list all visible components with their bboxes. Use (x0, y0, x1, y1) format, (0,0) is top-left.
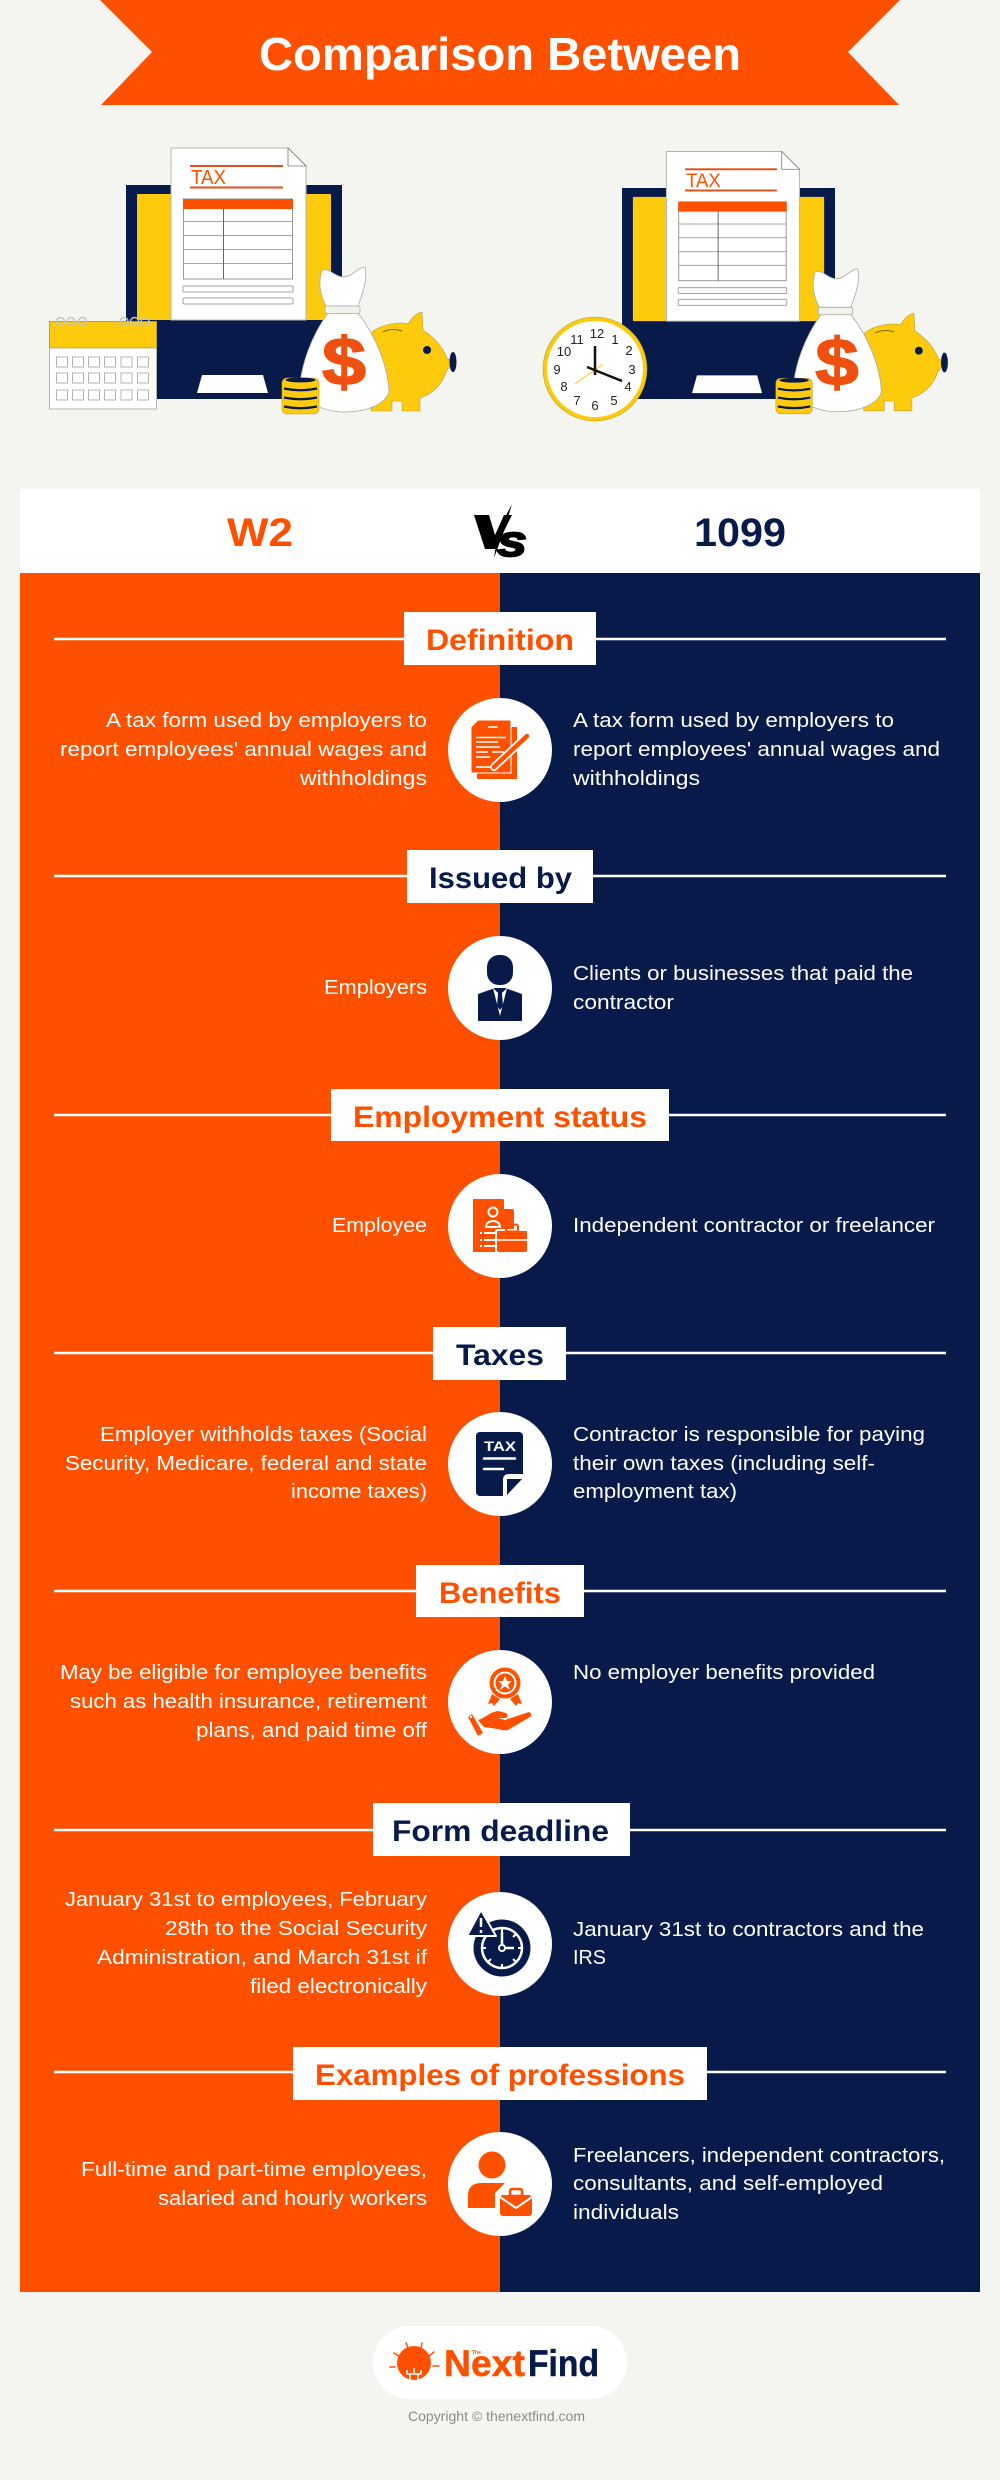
icon: person with briefcase (468, 2152, 532, 2216)
illustration: 1099 tax form, clock, money bag and piggy bank: 1 (611, 332, 619, 347)
1099 issued by text (573, 962, 913, 1014)
W2 taxes text: Security, Medicare, federal and state (65, 1452, 427, 1475)
1099 taxes text: their own taxes (including self- (573, 1452, 875, 1475)
section: Issued by: Issued by (429, 862, 572, 895)
W2 form deadline text (65, 1888, 428, 1998)
section: Employment status (54, 1089, 946, 1278)
illustration: 1099 tax form, clock, money bag and piggy bank: 7 (573, 393, 581, 408)
W2 form deadline text: 28th to the Social Security (165, 1917, 428, 1940)
1099 taxes text: employment tax) (573, 1480, 737, 1503)
1099 benefits text: No employer benefits provided (573, 1661, 875, 1684)
W2 definition text: report employees' annual wages and (60, 738, 427, 761)
illustration: 1099 tax form, clock, money bag and piggy bank: 11 (570, 332, 584, 347)
section: Form deadline: Form deadline (392, 1815, 609, 1848)
W2 examples text: salaried and hourly workers (158, 2187, 427, 2210)
1099 definition text: withholdings (572, 767, 700, 790)
1099 issued by text: contractor (573, 991, 674, 1014)
section: Form deadline (54, 1803, 946, 1998)
icon: tax document: TAX (484, 1439, 516, 1454)
illustration: 1099 tax form, clock, money bag and piggy bank: 12 (590, 326, 604, 341)
1099 examples text (573, 2144, 945, 2224)
section: Examples of professions (54, 2047, 946, 2236)
1099 examples text: individuals (573, 2201, 679, 2224)
icon: tax document (476, 1432, 524, 1497)
1099 examples text: Freelancers, independent contractors, (573, 2144, 945, 2167)
1099 form deadline text (573, 1918, 924, 1969)
section: Benefits (54, 1565, 946, 1754)
W2 form deadline text: January 31st to employees, February (65, 1888, 428, 1911)
W2 issued by text: Employers (324, 976, 427, 999)
section: Taxes: Taxes (456, 1339, 544, 1372)
1099 form deadline text: January 31st to contractors and the (573, 1918, 924, 1941)
W2 taxes text (65, 1423, 427, 1503)
W2 benefits text: such as health insurance, retirement (70, 1690, 427, 1713)
1099 taxes text (573, 1423, 925, 1503)
column header bar: W2 (227, 511, 293, 555)
W2 benefits text: May be eligible for employee benefits (60, 1661, 427, 1684)
W2 form deadline text: Administration, and March 31st if (97, 1946, 427, 1969)
1099 issued by text: Clients or businesses that paid the (573, 962, 913, 985)
1099 examples text: consultants, and self-employed (573, 2172, 883, 2195)
icon: hand holding medal (468, 1668, 531, 1736)
title banner: Comparison Between (259, 28, 741, 80)
versus badge (474, 504, 527, 566)
title banner (100, 0, 900, 105)
illustration: 1099 tax form, clock, money bag and piggy bank: TAX (686, 170, 721, 192)
icon: clock with warning (467, 1910, 530, 1976)
illustration: 1099 tax form, clock, money bag and piggy bank: 3 (628, 362, 636, 377)
footer logo: Next (444, 2343, 525, 2384)
section: Definition (54, 612, 946, 802)
illustration: 1099 tax form, clock, money bag and piggy bank: 10 (557, 344, 571, 359)
illustration: 1099 tax form, clock, money bag and piggy bank (543, 152, 948, 421)
W2 definition text: A tax form used by employers to (106, 709, 427, 732)
W2 taxes text: Employer withholds taxes (Social (100, 1423, 427, 1446)
footer logo: The (472, 2350, 481, 2356)
illustration: 1099 tax form, clock, money bag and piggy bank: 8 (560, 379, 568, 394)
W2 definition text (60, 709, 427, 790)
illustration: W2 tax form, calendar, money bag and piggy bank: $ (322, 324, 366, 400)
illustration: 1099 tax form, clock, money bag and piggy bank: 2 (625, 343, 633, 358)
illustration: W2 tax form, calendar, money bag and piggy bank: TAX (191, 167, 226, 189)
W2 employment status text: Employee (332, 1214, 427, 1237)
illustration: 1099 tax form, clock, money bag and piggy bank: 5 (610, 393, 618, 408)
illustration: 1099 tax form, clock, money bag and piggy bank: 6 (591, 398, 599, 413)
footer logo (373, 2326, 627, 2399)
W2 form deadline text: filed electronically (250, 1975, 428, 1998)
illustration: 1099 tax form, clock, money bag and piggy bank: 4 (624, 379, 632, 394)
column header bar: 1099 (694, 511, 786, 555)
icon: document and pen (471, 720, 527, 779)
icon: person in suit (478, 955, 522, 1021)
versus badge: s (497, 517, 527, 566)
W2 benefits text (60, 1661, 427, 1742)
1099 definition text: A tax form used by employers to (573, 709, 894, 732)
footer logo: Find (528, 2343, 599, 2384)
W2 taxes text: income taxes) (291, 1480, 427, 1503)
copyright: Copyright © thenextfind.com (408, 2408, 585, 2424)
column header bar (20, 489, 980, 573)
W2 examples text: Full-time and part-time employees, (81, 2158, 427, 2181)
W2 definition text: withholdings (299, 767, 427, 790)
section: Issued by (54, 850, 946, 1040)
section: Examples of professions: Examples of professions (315, 2059, 685, 2092)
W2 examples text (81, 2158, 427, 2210)
1099 employment status text: Independent contractor or freelancer (573, 1214, 935, 1237)
W2 benefits text: plans, and paid time off (196, 1719, 427, 1742)
section: Employment status: Employment status (353, 1101, 647, 1134)
section: Taxes (54, 1327, 946, 1516)
icon: employee file and briefcase (473, 1199, 529, 1254)
section: Definition: Definition (426, 624, 574, 657)
1099 form deadline text: IRS (573, 1946, 606, 1969)
1099 definition text (572, 709, 940, 790)
section: Benefits: Benefits (439, 1577, 561, 1610)
comparison panel background (20, 573, 980, 2292)
illustration: 1099 tax form, clock, money bag and piggy bank: 9 (553, 362, 561, 377)
1099 definition text: report employees' annual wages and (573, 738, 940, 761)
illustration: W2 tax form, calendar, money bag and piggy bank (50, 148, 456, 414)
1099 taxes text: Contractor is responsible for paying (573, 1423, 925, 1446)
icon: sun logo (390, 2343, 439, 2384)
illustration: 1099 tax form, clock, money bag and piggy bank: $ (815, 325, 859, 400)
